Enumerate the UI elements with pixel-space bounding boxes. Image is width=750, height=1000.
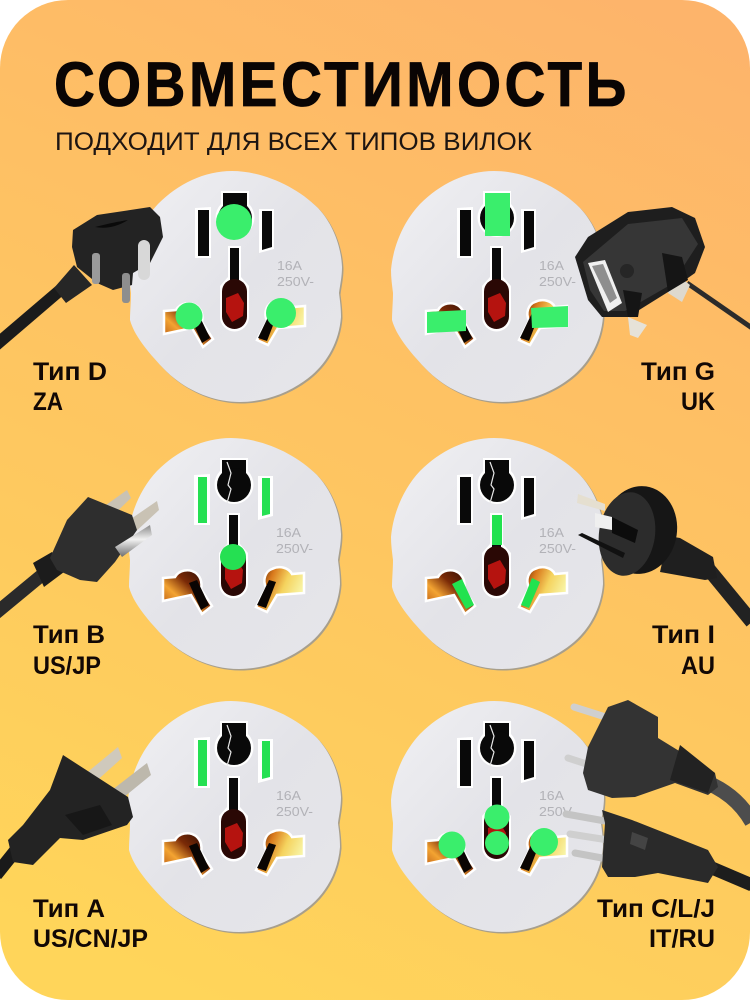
- socket: type B: 16A: [276, 525, 301, 540]
- socket: type G: [391, 171, 606, 404]
- green contacts: type D: [176, 204, 296, 330]
- green contacts: type G: [427, 193, 568, 333]
- label: type G: Тип G: [641, 358, 715, 386]
- label: type D: [33, 358, 107, 416]
- socket: type G: 250V-: [539, 274, 576, 289]
- label: type B: US/JP: [33, 652, 101, 680]
- label: type C/L/J: IT/RU: [649, 925, 715, 953]
- plug: type D: [0, 207, 163, 345]
- plug: type G: [575, 207, 750, 338]
- socket: type A: 250V-: [276, 804, 313, 819]
- label: type C/L/J: [597, 895, 715, 953]
- label: type I: [652, 621, 715, 680]
- socket: type C/L/J: 16A: [539, 788, 564, 803]
- label: type A: [33, 895, 148, 953]
- green contacts: type B: [198, 477, 270, 570]
- plug: type L: [566, 810, 750, 885]
- label: type I: AU: [681, 652, 715, 680]
- subtitle: ПОДХОДИТ ДЛЯ ВСЕХ ТИПОВ ВИЛОК: [55, 128, 532, 156]
- socket: type B: [128, 438, 342, 670]
- socket: type D: 250V-: [277, 274, 314, 289]
- label: type D: Тип D: [33, 358, 107, 386]
- socket: type I: 16A: [539, 525, 564, 540]
- label: type B: [33, 621, 105, 680]
- label: type A: Тип A: [33, 895, 105, 923]
- plug: type B: [0, 490, 159, 613]
- plug: type A: [0, 747, 151, 875]
- title: СОВМЕСТИМОСТЬ: [54, 49, 626, 120]
- label: type G: UK: [681, 388, 715, 416]
- socket: type B: 250V-: [276, 541, 313, 556]
- label: type D: ZA: [33, 388, 63, 416]
- socket: type G: 16A: [539, 258, 564, 273]
- label: type C/L/J: Тип C/L/J: [597, 895, 715, 923]
- green contacts: type A: [198, 740, 270, 786]
- label: type A: US/CN/JP: [33, 925, 148, 953]
- green contacts: type I: [452, 515, 540, 609]
- socket: type A: [128, 701, 342, 934]
- label: type G: [641, 358, 715, 416]
- label: type I: Тип I: [652, 621, 715, 649]
- socket: type D: [129, 171, 344, 404]
- socket: type C/L/J: [391, 701, 606, 934]
- label: type B: Тип B: [33, 621, 105, 649]
- socket: type C/L/J: 250V-: [539, 804, 576, 819]
- plug: type C: [568, 700, 750, 822]
- green contacts: type C/L/J: [438, 804, 558, 858]
- plug: type I: [577, 481, 750, 622]
- socket: type I: 250V-: [539, 541, 576, 556]
- socket: type A: 16A: [276, 788, 301, 803]
- socket: type D: 16A: [277, 258, 302, 273]
- socket: type I: [391, 438, 606, 670]
